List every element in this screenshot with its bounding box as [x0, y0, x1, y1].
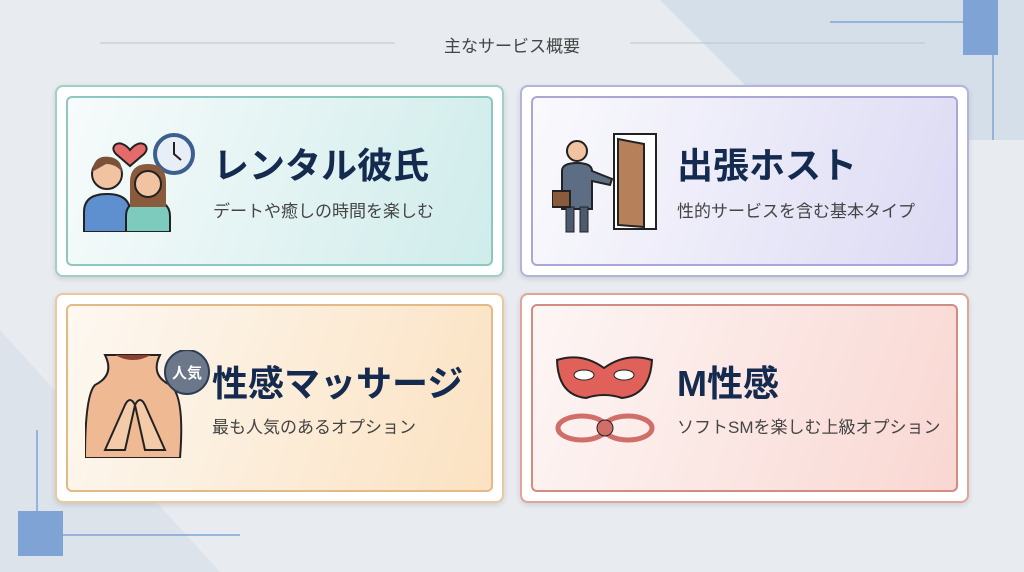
icon: massage with badge: 人気: [172, 364, 202, 382]
icon: massage with badge: [85, 350, 210, 458]
heading: レンタル彼氏: [213, 145, 429, 186]
title: 主なサービス概要: [444, 37, 580, 56]
heading: M性感: [677, 363, 779, 404]
icon: couple: [83, 133, 195, 232]
text: ソフトSMを楽しむ上級オプション: [677, 418, 940, 437]
panel: rental boyfriend: [55, 85, 504, 277]
heading: 性感マッサージ: [212, 363, 463, 404]
icon: host at door: [552, 133, 657, 232]
panel: business host: [520, 85, 969, 277]
icon: mask and rope: [556, 356, 654, 442]
text: 性的サービスを含む基本タイプ: [677, 202, 915, 221]
panel: M: [520, 293, 969, 503]
text: 最も人気のあるオプション: [212, 418, 416, 437]
text: デートや癒しの時間を楽しむ: [213, 202, 434, 221]
heading: 出張ホスト: [677, 145, 857, 186]
panel: massage: [55, 293, 504, 503]
